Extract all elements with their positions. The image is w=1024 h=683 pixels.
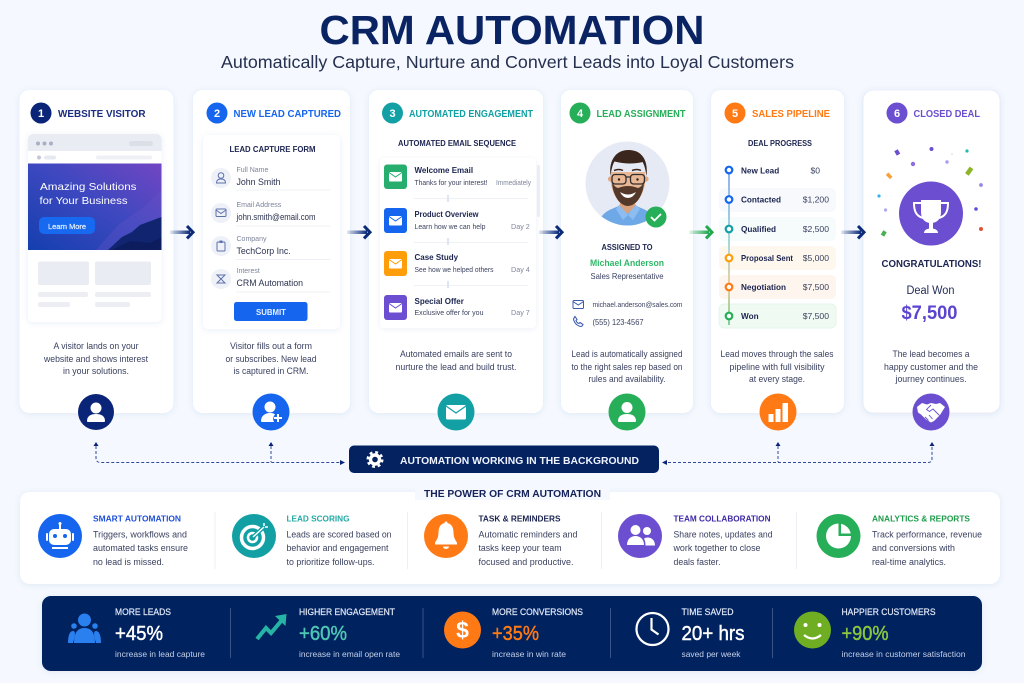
email 3: Day 4 xyxy=(511,265,530,274)
step number 3: 3 xyxy=(389,108,396,120)
step number 1: 1 xyxy=(38,108,44,120)
panel: step 1 website visitor xyxy=(20,90,174,430)
assigned to block: Sales Representative xyxy=(590,271,664,281)
stage: new lead: New Lead xyxy=(741,166,779,176)
stat: higher engagement: +60% xyxy=(299,623,347,645)
step number 6 xyxy=(886,102,908,124)
confetti xyxy=(877,147,983,237)
assigned to block xyxy=(590,243,664,281)
panel: the power of crm automation xyxy=(20,486,1000,584)
trophy badge xyxy=(899,182,963,246)
stat: time saved: TIME SAVED xyxy=(682,607,734,617)
section heading: THE POWER OF CRM AUTOMATION xyxy=(424,489,601,500)
stage: won: Won xyxy=(741,312,759,321)
stage: proposal sent: $5,000 xyxy=(803,253,829,263)
hero banner: Learn More xyxy=(48,222,86,231)
stat: happier customers: HAPPIER CUSTOMERS xyxy=(842,607,936,617)
subheading: email sequence: AUTOMATED EMAIL SEQUENCE xyxy=(398,139,517,148)
stat: happier customers: increase in customer satisfaction xyxy=(842,649,966,659)
panel: step 4 lead assignment xyxy=(561,90,693,430)
email 2 xyxy=(384,208,530,233)
step number 5 xyxy=(724,102,746,124)
step number 4: 4 xyxy=(577,108,584,120)
hero banner xyxy=(28,164,162,250)
lead capture form: LEAD CAPTURE FORM xyxy=(230,145,316,154)
icon: gear xyxy=(368,452,382,467)
heading: closed deal: CLOSED DEAL xyxy=(914,108,981,120)
description 4: to the right sales rep based on xyxy=(572,362,682,373)
step number 4 xyxy=(570,102,590,124)
step number 5: 5 xyxy=(732,108,738,120)
stat: more leads xyxy=(68,607,205,659)
description 4: Lead is automatically assigned xyxy=(572,349,682,360)
submit button xyxy=(234,302,308,321)
field: full name: John Smith xyxy=(236,177,281,187)
submit button: SUBMIT xyxy=(256,308,286,317)
feature: task and reminders: tasks keep your team xyxy=(478,543,562,553)
description 1: A visitor lands on your xyxy=(54,341,138,352)
icon: person xyxy=(608,394,646,430)
panel: step 3 automated engagement xyxy=(369,90,543,430)
feature: team collaboration: Share notes, updates and xyxy=(674,530,772,540)
description 1: in your solutions. xyxy=(63,366,129,377)
email 3: Case Study xyxy=(414,253,459,262)
congratulations text: CONGRATULATIONS! xyxy=(882,259,982,270)
email 4: Day 7 xyxy=(511,308,530,317)
description 1: website and shows interest xyxy=(43,354,148,365)
icon: handshake xyxy=(912,394,950,430)
email 2: Product Overview xyxy=(414,210,479,219)
description 6: happy customer and the xyxy=(884,362,978,373)
stat: higher engagement xyxy=(257,607,400,659)
icon: person xyxy=(78,394,114,430)
email 3: See how we helped others xyxy=(414,265,494,274)
stage: contacted xyxy=(726,194,829,204)
banner: automation working in the background: AUTOMATION WORKING IN THE BACKGROUND xyxy=(400,455,639,467)
email 4: Exclusive offer for you xyxy=(414,308,484,317)
feature: analytics and reports: Track performance, revenue xyxy=(872,530,982,540)
feature: lead scoring: behavior and engagement xyxy=(286,543,389,553)
feature: smart automation: automated tasks ensure xyxy=(93,543,188,553)
email 1: Welcome Email xyxy=(414,166,473,175)
feature: lead scoring: to prioritize follow-ups. xyxy=(286,557,374,567)
description 6: journey continues. xyxy=(895,374,966,385)
stage: negotiation xyxy=(726,282,829,292)
stat: more conversions: MORE CONVERSIONS xyxy=(492,607,583,617)
arrow 3 to 4 xyxy=(539,226,562,238)
feature: analytics and reports: ANALYTICS & REPORTS xyxy=(872,514,970,524)
hero banner: for Your Business xyxy=(40,195,128,207)
feature: task and reminders xyxy=(424,514,578,567)
feature: team collaboration: work together to close xyxy=(673,543,760,553)
feature: smart automation: SMART AUTOMATION xyxy=(93,514,181,524)
assigned to block: Michael Anderson xyxy=(590,258,664,269)
heading: automated engagement: AUTOMATED ENGAGEMENT xyxy=(409,108,534,120)
deal won label: Deal Won xyxy=(906,285,954,297)
lead capture form xyxy=(203,135,340,329)
stat: more leads: +45% xyxy=(115,623,163,645)
description 2: Visitor fills out a form xyxy=(230,341,312,352)
feature: lead scoring: LEAD SCORING xyxy=(286,514,350,524)
stage: qualified: Qualified xyxy=(741,225,776,234)
email 2: Learn how we can help xyxy=(414,222,486,231)
description 5: at every stage. xyxy=(749,374,805,385)
stage: negotiation: Negotiation xyxy=(741,283,786,292)
step number 2: 2 xyxy=(214,108,220,120)
description 4: rules and availability. xyxy=(588,374,666,385)
email sequence list xyxy=(380,158,540,328)
stage: proposal sent xyxy=(726,253,829,263)
assigned to block: ASSIGNED TO xyxy=(602,243,652,252)
icon: bar chart xyxy=(760,394,796,430)
panel: results stats bar xyxy=(42,596,982,671)
feature: analytics and reports xyxy=(816,514,982,567)
email 3 xyxy=(384,251,530,276)
feature: smart automation: Triggers, workflows and xyxy=(93,530,187,540)
description 6 xyxy=(884,349,978,385)
hero banner: Amazing Solutions xyxy=(40,181,136,193)
panel: step 2 new lead captured xyxy=(193,90,350,430)
description 1 xyxy=(43,341,148,377)
stat: higher engagement: HIGHER ENGAGEMENT xyxy=(299,607,396,617)
step number 1 xyxy=(30,102,52,124)
field: company: TechCorp Inc. xyxy=(236,246,291,256)
arrow 1 to 2 xyxy=(170,226,193,238)
description 3: nurture the lead and build trust. xyxy=(396,362,516,373)
description 2: or subscribes. New lead xyxy=(226,354,316,365)
contact details: (555) 123-4567 xyxy=(592,318,644,327)
feature: task and reminders: Automatic reminders and xyxy=(478,530,578,540)
feature: analytics and reports: real-time analytics. xyxy=(872,557,946,567)
arrow 2 to 3 xyxy=(347,226,370,238)
stat: more conversions: increase in win rate xyxy=(492,649,566,659)
stat: more leads: increase in lead capture xyxy=(115,649,205,659)
arrow 5 to 6 xyxy=(841,226,864,238)
stage: new lead xyxy=(726,166,820,176)
stat: more conversions xyxy=(444,607,583,659)
feature: analytics and reports: and conversions with xyxy=(872,543,955,553)
icon: add person xyxy=(252,394,290,430)
pipeline stages xyxy=(719,166,836,328)
step number 3 xyxy=(382,102,403,124)
heading: sales pipeline: SALES PIPELINE xyxy=(752,108,830,120)
feature: lead scoring: Leads are scored based on xyxy=(286,530,392,540)
description 2: is captured in CRM. xyxy=(234,366,308,377)
description 6: The lead becomes a xyxy=(892,349,970,360)
email 1: Immediately xyxy=(496,178,531,187)
stat: more conversions: +35% xyxy=(492,623,539,645)
contact details: michael.anderson@sales.com xyxy=(592,300,682,309)
feature: task and reminders: focused and productive. xyxy=(478,557,574,567)
email 1 xyxy=(384,164,531,189)
field: email: john.smith@email.com xyxy=(236,212,316,222)
description 3 xyxy=(396,349,516,373)
icon: envelope xyxy=(438,394,474,430)
email 4 xyxy=(384,295,530,320)
email 2: Day 2 xyxy=(511,222,530,231)
feature: task and reminders: TASK & REMINDERS xyxy=(478,514,561,524)
field: full name xyxy=(211,167,330,190)
title: CRM AUTOMATION xyxy=(320,7,704,53)
stat: time saved: saved per week xyxy=(682,649,741,659)
heading: new lead captured: NEW LEAD CAPTURED xyxy=(234,108,341,120)
stage: qualified xyxy=(726,224,829,234)
contact details xyxy=(573,300,682,327)
automation connector lines xyxy=(94,442,934,465)
field: interest: CRM Automation xyxy=(236,278,303,288)
feature: smart automation xyxy=(38,514,188,567)
stage: won: $7,500 xyxy=(803,311,829,321)
description 3: Automated emails are sent to xyxy=(400,349,512,360)
description 5: pipeline with full visibility xyxy=(730,362,825,373)
feature: smart automation: no lead is missed. xyxy=(93,557,164,567)
stat: higher engagement: increase in email open rate xyxy=(299,649,400,659)
deal value: $7,500 xyxy=(902,303,958,324)
field: full name: Full Name xyxy=(236,167,269,174)
field: interest xyxy=(211,268,330,292)
stat: happier customers: +90% xyxy=(842,623,889,645)
stage: qualified: $2,500 xyxy=(803,224,829,234)
description 5: Lead moves through the sales xyxy=(720,349,834,360)
stage: won xyxy=(726,311,829,321)
stat: time saved xyxy=(636,607,744,659)
field: email xyxy=(211,202,330,226)
stat: more leads: MORE LEADS xyxy=(115,607,171,617)
stat: time saved: 20+ hrs xyxy=(682,623,744,645)
field: company xyxy=(211,236,330,260)
field: company: Company xyxy=(236,236,267,243)
step number 6: 6 xyxy=(894,108,900,120)
stage: contacted: $1,200 xyxy=(803,194,829,204)
stage: proposal sent: Proposal Sent xyxy=(741,254,793,263)
website mockup xyxy=(28,134,162,322)
stage: negotiation: $7,500 xyxy=(803,282,829,292)
email 1: Thanks for your interest! xyxy=(414,178,488,187)
feature: team collaboration xyxy=(618,514,772,567)
field: interest: Interest xyxy=(236,268,260,275)
panel: step 6 closed deal xyxy=(863,90,1000,430)
feature: lead scoring xyxy=(232,514,392,567)
stat: more conversions: $ xyxy=(456,617,469,643)
heading: website visitor: WEBSITE VISITOR xyxy=(58,108,146,120)
stage: new lead: $0 xyxy=(810,166,820,176)
subtitle: Automatically Capture, Nurture and Convert Leads into Loyal Customers xyxy=(221,52,794,72)
email 4: Special Offer xyxy=(414,297,464,306)
field: email: Email Address xyxy=(236,202,282,209)
arrow 4 to 5 xyxy=(689,226,712,238)
step number 2 xyxy=(206,102,228,124)
banner: automation working in the background xyxy=(349,446,659,473)
panel: step 5 sales pipeline xyxy=(711,90,844,430)
stage: contacted: Contacted xyxy=(741,196,781,204)
feature: team collaboration: deals faster. xyxy=(674,557,720,567)
description 5 xyxy=(720,349,834,385)
description 2 xyxy=(226,341,316,377)
description 4 xyxy=(572,349,682,385)
feature: team collaboration: TEAM COLLABORATION xyxy=(674,514,770,524)
check badge xyxy=(646,206,666,228)
portrait: sales rep xyxy=(586,142,670,228)
heading: lead assignment: LEAD ASSIGNMENT xyxy=(596,108,686,120)
stat: happier customers xyxy=(794,607,966,659)
subheading: deal progress: DEAL PROGRESS xyxy=(748,139,813,148)
